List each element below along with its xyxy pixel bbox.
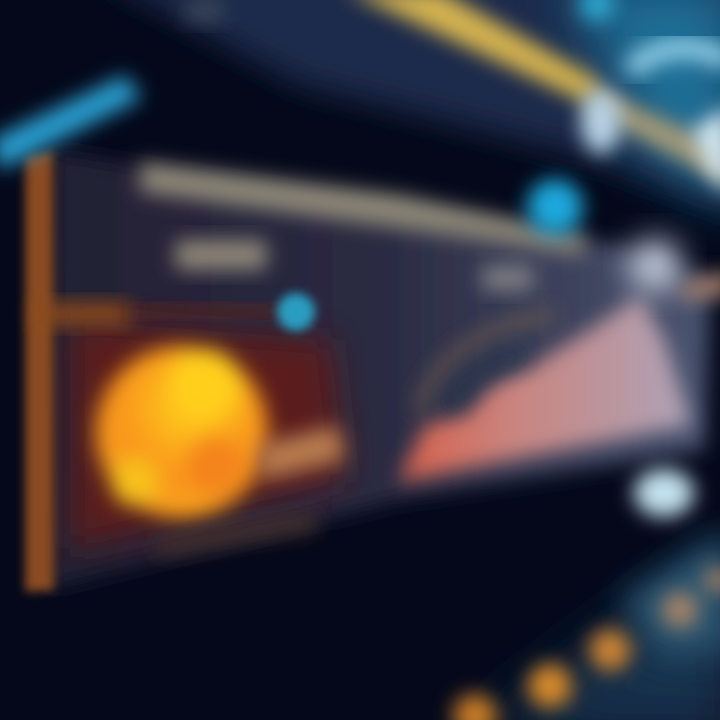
title text band — [140, 162, 585, 255]
top left faint mark — [185, 0, 223, 22]
chart arc — [420, 315, 555, 412]
faint orange rule — [130, 306, 280, 316]
orange pie chart — [96, 346, 268, 518]
gold streak — [345, 0, 720, 185]
caption under pie — [155, 512, 318, 556]
lower right blue glow — [620, 530, 720, 655]
chart arc inner shadow — [448, 352, 525, 410]
pie chart side label — [258, 425, 345, 480]
right background glow — [470, 0, 720, 720]
cyan glow top edge — [579, 0, 615, 22]
white glow lower — [634, 469, 694, 517]
cyan dot top — [527, 179, 583, 235]
top navy band — [90, 0, 720, 215]
left vertical orange bar — [25, 150, 54, 592]
panel: left maroon chart area — [70, 320, 345, 550]
cyan streak — [0, 75, 142, 170]
orange dots — [453, 567, 720, 720]
orange pointer right — [680, 270, 720, 300]
central panel — [45, 150, 710, 590]
horizontal orange bar — [35, 303, 130, 325]
white glow top — [581, 90, 621, 154]
subtitle block right — [482, 265, 534, 291]
white glow far right — [692, 105, 720, 195]
white glow top right — [630, 48, 720, 72]
subtitle block left — [175, 240, 267, 270]
area chart — [398, 295, 692, 482]
cyan dot left — [277, 293, 315, 331]
white glow right panel corner — [629, 239, 681, 291]
